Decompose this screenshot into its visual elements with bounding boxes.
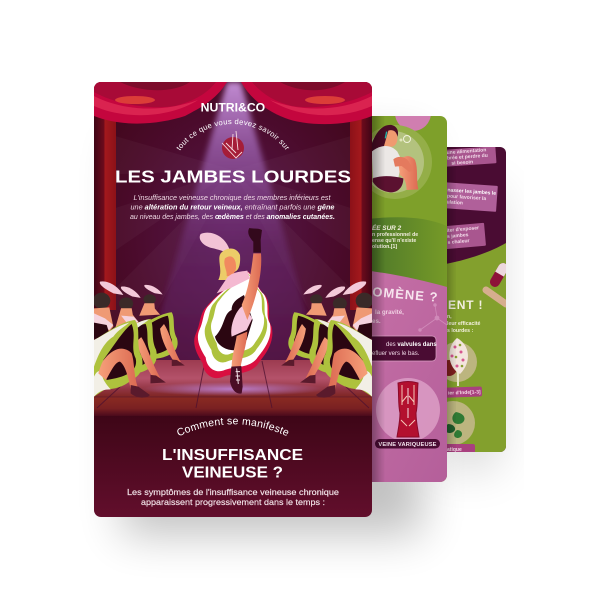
text: back card: n, bbox=[447, 314, 452, 320]
chorus dancers: left bbox=[93, 281, 185, 398]
tip box 3 bbox=[447, 222, 486, 249]
icon: pink disc bbox=[395, 116, 431, 131]
label: veine variqueuse: VEINE VARIQUEUSE bbox=[378, 442, 437, 448]
text: symptoms: Les symptômes de l'insuffisance veineuse chronique bbox=[127, 487, 339, 497]
curved subheading: Comment se manifeste bbox=[177, 418, 288, 436]
tip box 1: si besoin bbox=[451, 159, 473, 167]
label: marron d'Inde bbox=[447, 386, 482, 398]
text: une personne sur 2: ense qu'il n'existe bbox=[372, 238, 416, 244]
icon: horse chestnut bbox=[447, 338, 477, 386]
heading: insuffisance veineuse: VEINEUSE ? bbox=[182, 465, 283, 482]
text: une personne sur 2: olution.[1] bbox=[372, 244, 397, 250]
tip box 2: pour favoriser la bbox=[447, 193, 486, 202]
heading: back card: ENT ! bbox=[448, 298, 483, 312]
back left dancer bbox=[134, 285, 185, 366]
text: symptoms: apparaissent progressivement dans le temps : bbox=[141, 497, 325, 507]
stage background bbox=[94, 82, 372, 360]
intro text bbox=[130, 193, 335, 221]
intro text: L'insuffisance veineuse chronique des membres inférieurs est bbox=[134, 193, 331, 202]
text: back card: s lourdes : bbox=[447, 328, 474, 334]
heading: insuffisance veineuse: L'INSUFFISANCE bbox=[162, 447, 303, 464]
label: marron d'Inde: ier d'Inde[1-3] bbox=[448, 389, 481, 397]
tip box 1 bbox=[447, 147, 496, 167]
thought bubble bbox=[372, 125, 432, 199]
intro text: au niveau des jambes, des œdèmes et des anomalies cutanées. bbox=[130, 212, 335, 221]
tip box 2 bbox=[447, 182, 498, 212]
label: veine variqueuse bbox=[375, 439, 440, 448]
text: gravité: la gravité, bbox=[375, 309, 404, 316]
drop shadow bbox=[122, 140, 500, 535]
tip box 2: nasser les jambes le bbox=[447, 187, 496, 197]
panel: back card bbox=[447, 147, 506, 452]
top left curtain bbox=[94, 82, 227, 124]
panel: middle card bbox=[372, 116, 447, 482]
icon: capsule bbox=[490, 263, 506, 287]
chorus dancers: right bbox=[281, 281, 373, 398]
heading: insuffisance veineuse bbox=[162, 447, 303, 482]
callout: valvules: des valvules dans bbox=[386, 342, 437, 348]
tip box 3: s jambes bbox=[447, 232, 469, 240]
logo: NUTRI&CO bbox=[201, 102, 265, 114]
illustration: lead dancer bbox=[194, 228, 272, 394]
curved kicker: tout ce que vous devez savoir sur bbox=[176, 118, 290, 150]
icon: wooden stick bbox=[486, 290, 506, 304]
card shadow on back card bbox=[447, 147, 456, 452]
label: centella asiatica bbox=[447, 444, 475, 452]
intro text: une altération du retour veineux, entraînant parfois une gêne bbox=[130, 202, 334, 211]
stage floor bbox=[94, 360, 372, 416]
front right dancer bbox=[316, 281, 373, 398]
text: back card: leur efficacité bbox=[447, 321, 481, 327]
text: symptoms bbox=[127, 487, 339, 507]
dark green section bbox=[372, 217, 446, 286]
tip box 2: ulation bbox=[446, 199, 463, 207]
spotlight bbox=[156, 82, 310, 360]
panel: front card bbox=[94, 82, 372, 517]
text: une personne sur 2: n professionnel de bbox=[372, 232, 418, 238]
tip box 3: iter d'exposer bbox=[446, 225, 479, 234]
pink section bbox=[372, 271, 447, 482]
tip box 3: s chaleur bbox=[447, 238, 470, 246]
back right dancer bbox=[281, 285, 332, 366]
heading: une personne sur 2: ÉE SUR 2 bbox=[372, 223, 402, 232]
text: gravité bbox=[372, 310, 404, 323]
tip box 1: une alimentation bbox=[446, 147, 487, 156]
heading: phénomène: OMÈNE ? bbox=[372, 284, 439, 305]
tip box 1: brée et perdre du bbox=[447, 153, 488, 162]
right curtain column bbox=[350, 115, 372, 310]
middle right dancer bbox=[300, 287, 355, 383]
light rays bbox=[94, 130, 372, 360]
green lower section bbox=[447, 243, 506, 452]
icon: centella bbox=[447, 401, 475, 444]
top right curtain bbox=[241, 82, 372, 124]
middle left dancer bbox=[111, 287, 166, 383]
icon: legs emblem bbox=[222, 131, 244, 159]
callout: valvules bbox=[372, 336, 436, 362]
text: gravité: es. bbox=[372, 318, 381, 325]
front card shadow bbox=[372, 116, 384, 482]
front left dancer bbox=[93, 281, 150, 398]
bottom panel bbox=[94, 416, 372, 517]
text: back card bbox=[447, 315, 480, 332]
title: LES JAMBES LOURDES bbox=[115, 167, 351, 187]
illustration: seated woman bbox=[370, 125, 418, 192]
callout: valvules: efluer vers le bas. bbox=[372, 351, 420, 357]
text: une personne sur 2 bbox=[372, 232, 418, 250]
left curtain column bbox=[94, 115, 116, 310]
label: centella asiatica: atique bbox=[447, 447, 462, 453]
illustration: varicose vein bbox=[376, 378, 440, 442]
molecule decoration bbox=[419, 304, 447, 331]
